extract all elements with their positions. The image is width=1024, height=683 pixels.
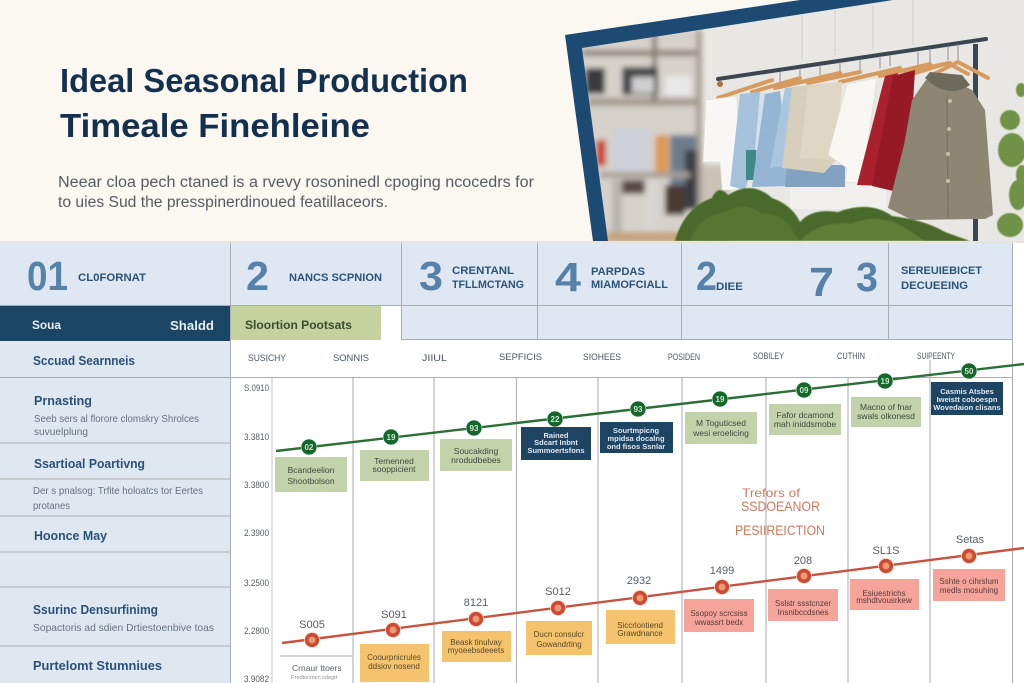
right side plant bbox=[997, 83, 1024, 237]
phase header 7 3: 7 bbox=[809, 259, 834, 305]
phase header text last: SEREUIEBICET bbox=[901, 265, 982, 277]
table grid lines bbox=[0, 243, 1012, 683]
green sub-header: Sloortion Pootsats bbox=[245, 318, 352, 332]
card: navy 3 bbox=[931, 382, 1003, 415]
header background bbox=[0, 0, 1024, 242]
y axis labels: 3.3810 bbox=[244, 432, 269, 443]
sidebar: description: Der s pnalsog: Trfite holoatcs tor Eertes bbox=[33, 485, 203, 497]
center annotation: PESIIREICTION bbox=[735, 523, 825, 538]
sidebar: description: protanes bbox=[33, 500, 70, 512]
chart column lines bbox=[272, 360, 930, 683]
sidebar background bbox=[0, 340, 230, 683]
card: green 2: Temenned bbox=[374, 456, 414, 466]
card: green 4: wesi eroelicing bbox=[692, 428, 749, 438]
phase header 3: CRENTANL bbox=[452, 265, 514, 277]
card: orange 3: Gowandrting bbox=[536, 640, 582, 649]
green milestone numbers: 19 bbox=[716, 395, 725, 404]
green milestone numbers: 19 bbox=[387, 433, 396, 442]
card: navy 1 bbox=[521, 427, 591, 460]
top table rule bbox=[0, 241, 1024, 243]
photo: clothing rack in boutique bbox=[570, 0, 1024, 245]
card: pink 2: Sslstr ssstcnzer bbox=[775, 599, 831, 608]
green milestone numbers: 02 bbox=[305, 443, 314, 452]
card: navy 2 bbox=[600, 422, 673, 453]
card: green 1 bbox=[275, 457, 347, 492]
phase header 2: 2 bbox=[246, 253, 269, 299]
green sub-header bbox=[231, 306, 381, 340]
card: green 6: Macno of fnar bbox=[860, 402, 912, 412]
values above red timeline: SL1S bbox=[873, 545, 899, 557]
card: orange 2: myoeebsdeeets bbox=[448, 646, 504, 655]
values above red timeline: 1499 bbox=[710, 565, 734, 577]
values above red timeline: 8121 bbox=[464, 597, 488, 609]
card: pink 1: Ssopoy scrcsiss bbox=[690, 609, 748, 618]
month labels: SONNIS bbox=[333, 353, 369, 364]
phase header 7 3: 3 bbox=[856, 254, 878, 300]
values above red timeline bbox=[299, 534, 985, 631]
phase header 2: NANCS SCPNION bbox=[289, 272, 382, 284]
red timeline bbox=[282, 548, 1024, 648]
values above red timeline: S005 bbox=[299, 619, 325, 631]
navy sub-header: Shaldd bbox=[170, 318, 214, 333]
green milestone numbers: 93 bbox=[634, 405, 643, 414]
card: green 6 bbox=[851, 397, 921, 427]
card: orange 2: Beask tinulvay bbox=[450, 638, 502, 647]
garment: red cardigan bbox=[857, 73, 898, 186]
photo frame bbox=[565, 0, 893, 241]
card: green 1: Bcandeelion bbox=[288, 465, 335, 475]
title: Timeale Finehleine bbox=[60, 107, 370, 144]
card: pink 2: Insnibccdsnes bbox=[778, 608, 828, 617]
green timeline bbox=[276, 363, 1024, 455]
card: orange 1: Coourpnicrules bbox=[367, 653, 421, 662]
card: navy 2: Sourtmpicng bbox=[613, 426, 660, 435]
table background bbox=[0, 242, 1012, 340]
red milestone centres bbox=[308, 552, 972, 644]
card: pink 1: wwassrt bedx bbox=[694, 618, 743, 627]
sidebar: Prnasting: Prnasting bbox=[34, 393, 92, 408]
phase header 01: 01 bbox=[27, 253, 68, 299]
phase header 3: 3 bbox=[419, 253, 443, 299]
green milestone numbers: 93 bbox=[470, 424, 479, 433]
card: green 1: Shootbolson bbox=[287, 476, 335, 486]
card: green 6: swals olkonesd bbox=[857, 411, 915, 421]
values above red timeline: Setas bbox=[956, 534, 985, 546]
card: orange 3 bbox=[526, 621, 592, 655]
green milestone numbers: 50 bbox=[965, 367, 974, 376]
month labels: SIOHEES bbox=[583, 352, 621, 363]
card: orange 1 bbox=[360, 644, 429, 682]
card: pink 3 bbox=[850, 579, 919, 610]
card: orange 4: Grawdnance bbox=[617, 629, 663, 638]
garment: light blue cardigan bbox=[730, 92, 761, 190]
card: navy 3: Casmis Atsbes bbox=[940, 387, 994, 396]
phase header 2 die: DIEE bbox=[716, 281, 743, 293]
month labels: CUTHIN bbox=[837, 351, 865, 362]
phase header 4: 4 bbox=[555, 254, 581, 300]
card: green 3: Soucakding bbox=[454, 446, 498, 456]
garment: denim lower bbox=[785, 165, 845, 187]
sidebar: Ssartioal Poartivng: Ssartioal Poartivng bbox=[34, 456, 145, 471]
phase header 3 bbox=[419, 253, 524, 299]
card: pink 3: Esiuestrichs bbox=[862, 589, 906, 598]
card: orange 2 bbox=[442, 631, 511, 662]
y axis labels: 3.2500 bbox=[244, 578, 269, 589]
title: Ideal Seasonal Production bbox=[60, 62, 468, 99]
y axis labels bbox=[244, 383, 269, 683]
card: navy 2: mpidsa docalng bbox=[607, 434, 665, 443]
sidebar: Purtelomt Stumniues: Purtelomt Stumniues bbox=[33, 658, 162, 673]
title bbox=[60, 62, 468, 144]
values above red timeline: 208 bbox=[794, 555, 812, 567]
y axis labels: 2.2800 bbox=[244, 626, 269, 637]
phase header 3: TFLLMCTANG bbox=[452, 279, 524, 291]
month labels bbox=[248, 351, 955, 364]
hanger hooks bbox=[780, 44, 958, 82]
sidebar: Prnasting bbox=[34, 393, 199, 438]
card: green 5 bbox=[769, 404, 841, 435]
card: pink 4: medls mosuhing bbox=[940, 586, 998, 595]
phase header 01 bbox=[27, 253, 146, 299]
red milestones bbox=[304, 548, 976, 648]
sidebar: Prnasting: Seeb sers al florore clomskry Shrolces bbox=[34, 413, 199, 425]
phase header 01: CL0FORNAT bbox=[78, 272, 146, 284]
green milestone numbers: 09 bbox=[800, 386, 809, 395]
rack rail and post bbox=[973, 44, 978, 242]
card: pink 3: mshdtvousrkew bbox=[856, 596, 912, 605]
phase header text last: DECUEEING bbox=[901, 280, 968, 292]
card: green 2: sooppicient bbox=[372, 464, 416, 474]
y axis labels: 3.3800 bbox=[244, 480, 269, 491]
card: navy 3: Iweistt coboespn bbox=[937, 395, 998, 404]
sidebar: Ssurinc Densurfinimg: Sopactoris ad sdien Drtiestoenbive toas bbox=[33, 622, 214, 634]
card: navy 2: ond fisos Ssnlar bbox=[607, 442, 665, 451]
month labels: SUSICHY bbox=[248, 353, 287, 364]
green milestone numbers bbox=[305, 367, 974, 452]
card: green 2 bbox=[360, 450, 429, 481]
center annotation: Trefors of bbox=[742, 486, 801, 500]
green bush bbox=[675, 188, 970, 241]
sidebar: Ssurinc Densurfinimg: Ssurinc Densurfinimg bbox=[33, 602, 158, 617]
center annotation: SSDOEANOR bbox=[741, 498, 820, 514]
card: green 3 bbox=[440, 439, 512, 471]
month labels: POSIDEN bbox=[668, 352, 700, 363]
navy sub-header bbox=[0, 306, 230, 341]
wooden hangers bbox=[718, 62, 988, 98]
month labels: SUIPEENTY bbox=[917, 351, 955, 362]
card: navy 1: Summoertsfons bbox=[527, 446, 585, 455]
card: orange 1: ddsiov nosend bbox=[368, 662, 420, 671]
card: navy 3: Wovedaion clisans bbox=[933, 403, 1001, 412]
garment: beige knit bbox=[782, 82, 842, 173]
white sub-header cell bbox=[381, 306, 401, 340]
values above red timeline: S012 bbox=[545, 586, 571, 598]
card: pink 2 bbox=[768, 589, 838, 621]
sidebar: Ssurinc Densurfinimg bbox=[33, 602, 214, 634]
phase header text last bbox=[901, 265, 982, 292]
card: orange 4 bbox=[606, 610, 675, 644]
card: orange 3: Ducn consulcr bbox=[534, 630, 585, 639]
green milestone numbers: 19 bbox=[881, 377, 890, 386]
phase header 4: MIAMOFCIALL bbox=[591, 279, 668, 291]
wall panels bbox=[802, 0, 913, 60]
phase header 2 bbox=[246, 253, 382, 299]
card: orange 4: Siccrlontiend bbox=[617, 621, 663, 630]
sidebar: Prnasting: suvuelplung bbox=[34, 426, 88, 438]
card: pink 4: Sshte o cihrslum bbox=[939, 577, 999, 586]
phase header 2 die bbox=[696, 253, 743, 299]
card: green 5: Fafor dcamond bbox=[776, 410, 834, 420]
phase header 4 bbox=[555, 254, 668, 300]
white boxes under rack bbox=[790, 183, 886, 209]
card: pink 4 bbox=[933, 569, 1005, 601]
card: green 4: M Toguticsed bbox=[696, 418, 746, 428]
garment: olive jacket bbox=[888, 76, 993, 220]
month labels: SEPFICIS bbox=[499, 352, 542, 363]
navy sub-header: Soua bbox=[32, 318, 61, 332]
month labels: JIIUL bbox=[422, 353, 447, 364]
garment: blue knit bbox=[752, 91, 790, 187]
card: navy 1: Rained bbox=[543, 431, 569, 440]
y axis labels: S.0910 bbox=[244, 383, 269, 394]
sidebar: description bbox=[33, 485, 203, 512]
values above red timeline: 2932 bbox=[627, 575, 651, 587]
y axis labels: 2.3900 bbox=[244, 528, 269, 539]
chart footnote bbox=[280, 656, 353, 681]
phase header 7 3 bbox=[809, 254, 878, 305]
phase header 2 die: 2 bbox=[696, 253, 717, 299]
intro text bbox=[58, 174, 534, 211]
intro text: to uies Sud the presspinerdinoued featillaceors. bbox=[58, 194, 388, 211]
chart footnote: Crnaur ttoers bbox=[292, 663, 342, 673]
phase header 4: PARPDAS bbox=[591, 266, 645, 278]
card: navy 1: Sdcart Inbnt bbox=[534, 438, 578, 447]
card: pink 1 bbox=[684, 599, 754, 632]
card: green 3: nrodudbebes bbox=[451, 455, 501, 465]
card: green 5: mah iniddsmobe bbox=[774, 419, 836, 429]
sidebar: Sccuad Searnneis: Sccuad Searnneis bbox=[33, 353, 135, 368]
values above red timeline: S091 bbox=[381, 609, 407, 621]
card: green 4 bbox=[685, 412, 757, 444]
green milestones bbox=[301, 363, 977, 455]
blurred shelves bbox=[575, 30, 730, 245]
month labels: SOBILEY bbox=[753, 351, 784, 362]
garment: white cardigan bbox=[828, 78, 877, 184]
center annotation bbox=[735, 486, 825, 538]
green milestone numbers: 22 bbox=[551, 415, 560, 424]
chart footnote: Predtocmen sdegd bbox=[291, 675, 337, 681]
garment: white top bbox=[703, 96, 740, 190]
sidebar: Hoonce May: Hoonce May bbox=[34, 528, 108, 543]
intro text: Neear cloa pech ctaned is a rvevy rosoninedl cpoging ncocedrs for bbox=[58, 174, 534, 191]
